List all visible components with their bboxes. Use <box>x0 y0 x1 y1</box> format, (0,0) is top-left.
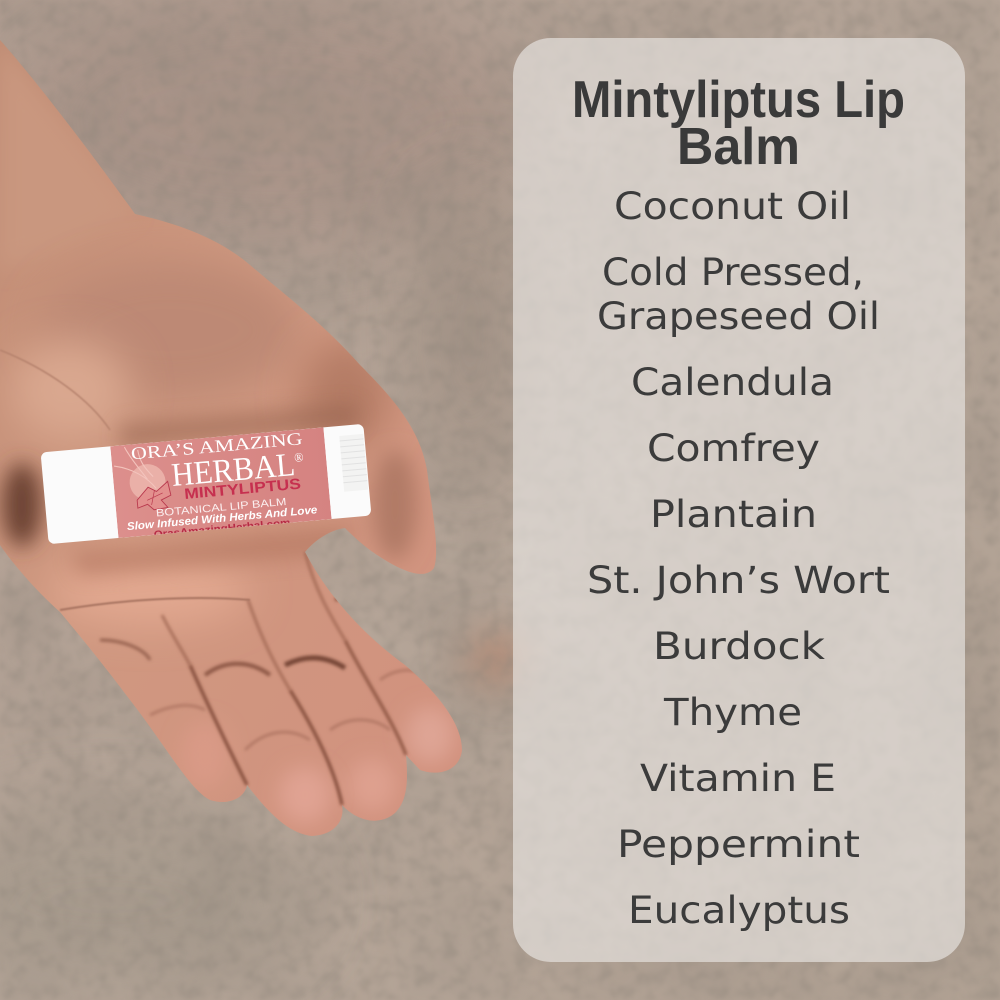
ingredient: Coconut Oil: Coconut Oil <box>614 185 851 228</box>
hand shading <box>0 40 454 823</box>
leaf emblem <box>114 447 172 510</box>
ingredient: Cold Pressed, Grapeseed Oil <box>597 251 880 338</box>
palm creases <box>60 598 250 610</box>
tagline: Slow Infused With Herbs And Love <box>126 504 318 533</box>
ingredient: Vitamin E: Vitamin E <box>640 757 836 800</box>
ingredient: Calendula: Calendula <box>631 361 834 404</box>
ingredient: St. John's Wort: St. John’s Wort <box>587 559 890 602</box>
panel title: Mintyliptus Lip <box>572 71 905 129</box>
ingredient: Burdock: Burdock <box>653 625 826 668</box>
ingredients panel <box>513 38 965 962</box>
tube body <box>41 424 371 544</box>
finger creases <box>100 640 150 660</box>
brand name HERBAL: HERBAL <box>170 446 305 494</box>
product type: BOTANICAL LIP BALM <box>155 496 287 520</box>
ingredient: Cold Pressed, Grapeseed Oil: Grapeseed Oil <box>597 295 880 338</box>
finger gaps <box>190 665 247 785</box>
hand silhouette <box>0 40 462 836</box>
ingredient: Eucalyptus: Eucalyptus <box>628 889 850 932</box>
ingredient: Peppermint: Peppermint <box>617 823 860 866</box>
ingredient: Thyme: Thyme <box>663 691 802 734</box>
panel title <box>572 71 905 176</box>
product name: MINTYLIPTUS <box>184 476 302 503</box>
pink product label <box>110 426 332 544</box>
brand name line: ORA’S AMAZING <box>130 428 304 464</box>
ingredient: Comfrey: Comfrey <box>647 427 820 470</box>
website: OrasAmazingHerbal.com <box>153 518 291 541</box>
hand holding the lip balm <box>0 40 462 836</box>
translucent panel background <box>513 38 965 962</box>
brand name HERBAL: ® <box>294 449 304 465</box>
ingredient: Plantain: Plantain <box>650 493 817 536</box>
ingredient: Cold Pressed, Grapeseed Oil: Cold Pressed, <box>602 251 864 294</box>
lip balm tube <box>40 423 372 550</box>
panel title: Balm <box>677 118 800 176</box>
right cap ribbed slider <box>339 434 368 492</box>
